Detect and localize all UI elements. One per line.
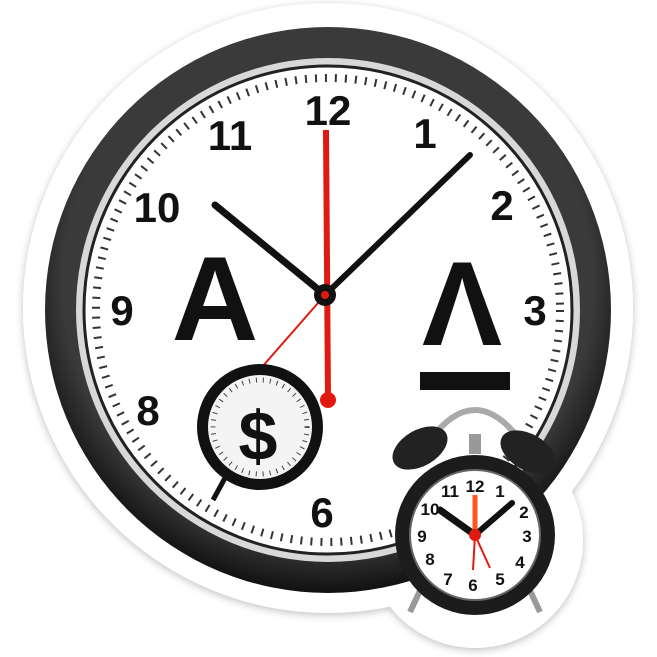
alarm clock: 5 (495, 570, 505, 589)
numbers: 11 (208, 112, 252, 159)
alarm clock: 9 (417, 527, 427, 546)
numbers: 10 (134, 184, 180, 231)
alarm clock: 1 (495, 482, 505, 501)
numbers: 9 (110, 287, 134, 334)
alarm clock: 4 (515, 553, 525, 572)
numbers (110, 87, 547, 536)
main clock: Λ (422, 237, 502, 371)
big letters: A (172, 232, 258, 366)
hands (215, 205, 325, 295)
alarm clock: 10 (421, 500, 439, 519)
alarm clock (385, 410, 563, 615)
numbers: 2 (490, 182, 514, 229)
stopwatch with dollar: $ (239, 397, 277, 475)
alarm clock: 7 (443, 570, 453, 589)
numbers: 12 (305, 87, 351, 134)
alarm clock: 3 (522, 527, 532, 546)
alarm clock: 11 (441, 482, 459, 501)
numbers: 1 (413, 110, 437, 157)
numbers: 8 (136, 387, 160, 434)
stopwatch with dollar (197, 364, 335, 500)
alarm clock: 2 (519, 503, 529, 522)
alarm clock: 8 (425, 550, 435, 569)
numbers: 6 (310, 489, 334, 536)
numbers: 3 (523, 287, 547, 334)
main clock (45, 27, 611, 593)
alarm clock: 6 (468, 576, 478, 595)
alarm clock: 12 (466, 477, 484, 496)
